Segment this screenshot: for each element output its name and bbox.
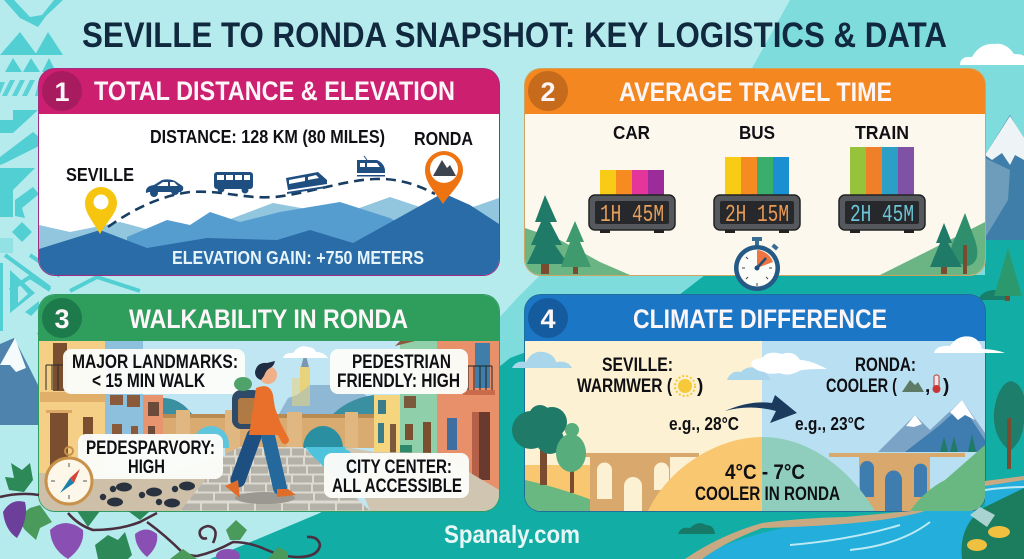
left buildings: [39, 341, 163, 481]
train column: 2H 45M: [850, 202, 914, 229]
callout: major landmarks: [63, 349, 245, 394]
vine with grapes: [0, 463, 320, 559]
cloud: [283, 346, 328, 358]
ronda label: RONDA: [414, 129, 473, 149]
callout: pedestrian friendly: [330, 349, 468, 394]
temperature difference: [695, 461, 840, 505]
icon: stopwatch: [734, 237, 780, 291]
trees right: [930, 213, 977, 274]
badge 2: 2: [540, 77, 556, 107]
ronda temperature: e.g., 23°C: [795, 414, 865, 434]
right buildings: [374, 341, 499, 490]
clouds: [512, 352, 572, 368]
badge 4: [528, 298, 568, 338]
heading 3: WALKABILITY IN RONDA: [129, 304, 408, 334]
heading 1: TOTAL DISTANCE & ELEVATION: [94, 76, 455, 106]
panel: total distance and elevation: [38, 68, 500, 276]
temperature difference: COOLER IN RONDA: [695, 484, 840, 505]
car column: CAR: [613, 123, 650, 143]
hills: [525, 222, 985, 275]
icon: bus: [214, 172, 253, 194]
train column: TRAIN: [855, 123, 909, 143]
callout: pedestrian friendly: PEDESTRIAN: [352, 352, 451, 373]
cobbled road: [175, 447, 375, 511]
badge 4: 4: [540, 304, 556, 334]
bus column: BUS: [739, 123, 775, 143]
bridge left: [584, 453, 699, 511]
callout: city center: CITY CENTER:: [346, 457, 452, 478]
website label: Spanaly.com: [444, 521, 580, 549]
temperature arrow: [725, 395, 797, 423]
seville climate: ): [697, 376, 703, 397]
bus column: [714, 123, 800, 233]
ronda climate: [826, 355, 949, 397]
callout: pedesparvory: [78, 434, 223, 479]
dashed route: [108, 179, 435, 227]
seville temperature: e.g., 28°C: [669, 414, 739, 434]
ronda climate: ,: [925, 376, 930, 397]
car column: 1H 45M: [600, 202, 664, 229]
badge 1: [42, 71, 82, 111]
panel: climate difference: [512, 294, 1024, 512]
water: [305, 447, 349, 458]
river and bank: [678, 476, 1024, 559]
seville label: SEVILLE: [66, 165, 134, 185]
mountains right: [878, 400, 985, 452]
panel: walkability: [0, 294, 1024, 559]
skyline: [163, 352, 374, 414]
icon: compass: [46, 447, 92, 504]
callout: major landmarks: < 15 MIN WALK: [92, 371, 205, 392]
badge 1: 1: [54, 77, 70, 107]
badge 3: 3: [54, 304, 70, 334]
footprints: [100, 482, 195, 508]
title: SEVILLE TO RONDA SNAPSHOT: KEY LOGISTICS & DATA: [82, 16, 947, 55]
bridge right: [829, 453, 965, 511]
callout: pedestrian friendly: FRIENDLY: HIGH: [337, 371, 460, 392]
panel: average travel time: [524, 68, 986, 276]
callout: pedesparvory: PEDESPARVORY:: [86, 438, 215, 459]
icon: seville pin: [85, 187, 117, 234]
callout: city center: [324, 453, 469, 498]
ronda climate: RONDA:: [855, 355, 916, 376]
callout: pedesparvory: HIGH: [128, 457, 165, 478]
ground: [39, 456, 225, 511]
left geometric pattern: [0, 0, 63, 331]
ronda climate: ): [943, 376, 949, 397]
train column: [839, 123, 925, 233]
elevation label: ELEVATION GAIN: +750 METERS: [172, 248, 424, 268]
bus column: 2H 15M: [725, 202, 789, 229]
climate dome: [648, 437, 875, 511]
badge 2: [528, 71, 568, 111]
callout: city center: ALL ACCESSIBLE: [332, 476, 462, 497]
trunk right: [1007, 418, 1011, 469]
icon: ronda pin: [425, 151, 463, 204]
trees left: [512, 405, 586, 493]
icon: tram: [286, 172, 327, 194]
callout: major landmarks: MAJOR LANDMARKS:: [72, 352, 238, 373]
tree right: [994, 381, 1024, 451]
car column: [589, 123, 675, 233]
lattice lines: [5, 255, 140, 335]
icon: car: [146, 179, 183, 197]
ronda climate: COOLER (: [826, 376, 898, 397]
icon: hiker: [225, 361, 296, 498]
seville climate: [577, 355, 703, 397]
bridge: [163, 410, 375, 460]
distance label: DISTANCE: 128 KM (80 MILES): [150, 127, 385, 147]
heading 4: CLIMATE DIFFERENCE: [633, 304, 887, 334]
heading 2: AVERAGE TRAVEL TIME: [619, 77, 892, 107]
seville climate: WARMWER (: [577, 376, 673, 397]
temperature difference: 4°C - 7°C: [725, 461, 805, 484]
seville climate: SEVILLE:: [602, 355, 673, 376]
icon: train: [357, 156, 385, 176]
trees left: [527, 195, 591, 274]
mountains: [39, 193, 499, 275]
badge 3: [42, 298, 82, 338]
